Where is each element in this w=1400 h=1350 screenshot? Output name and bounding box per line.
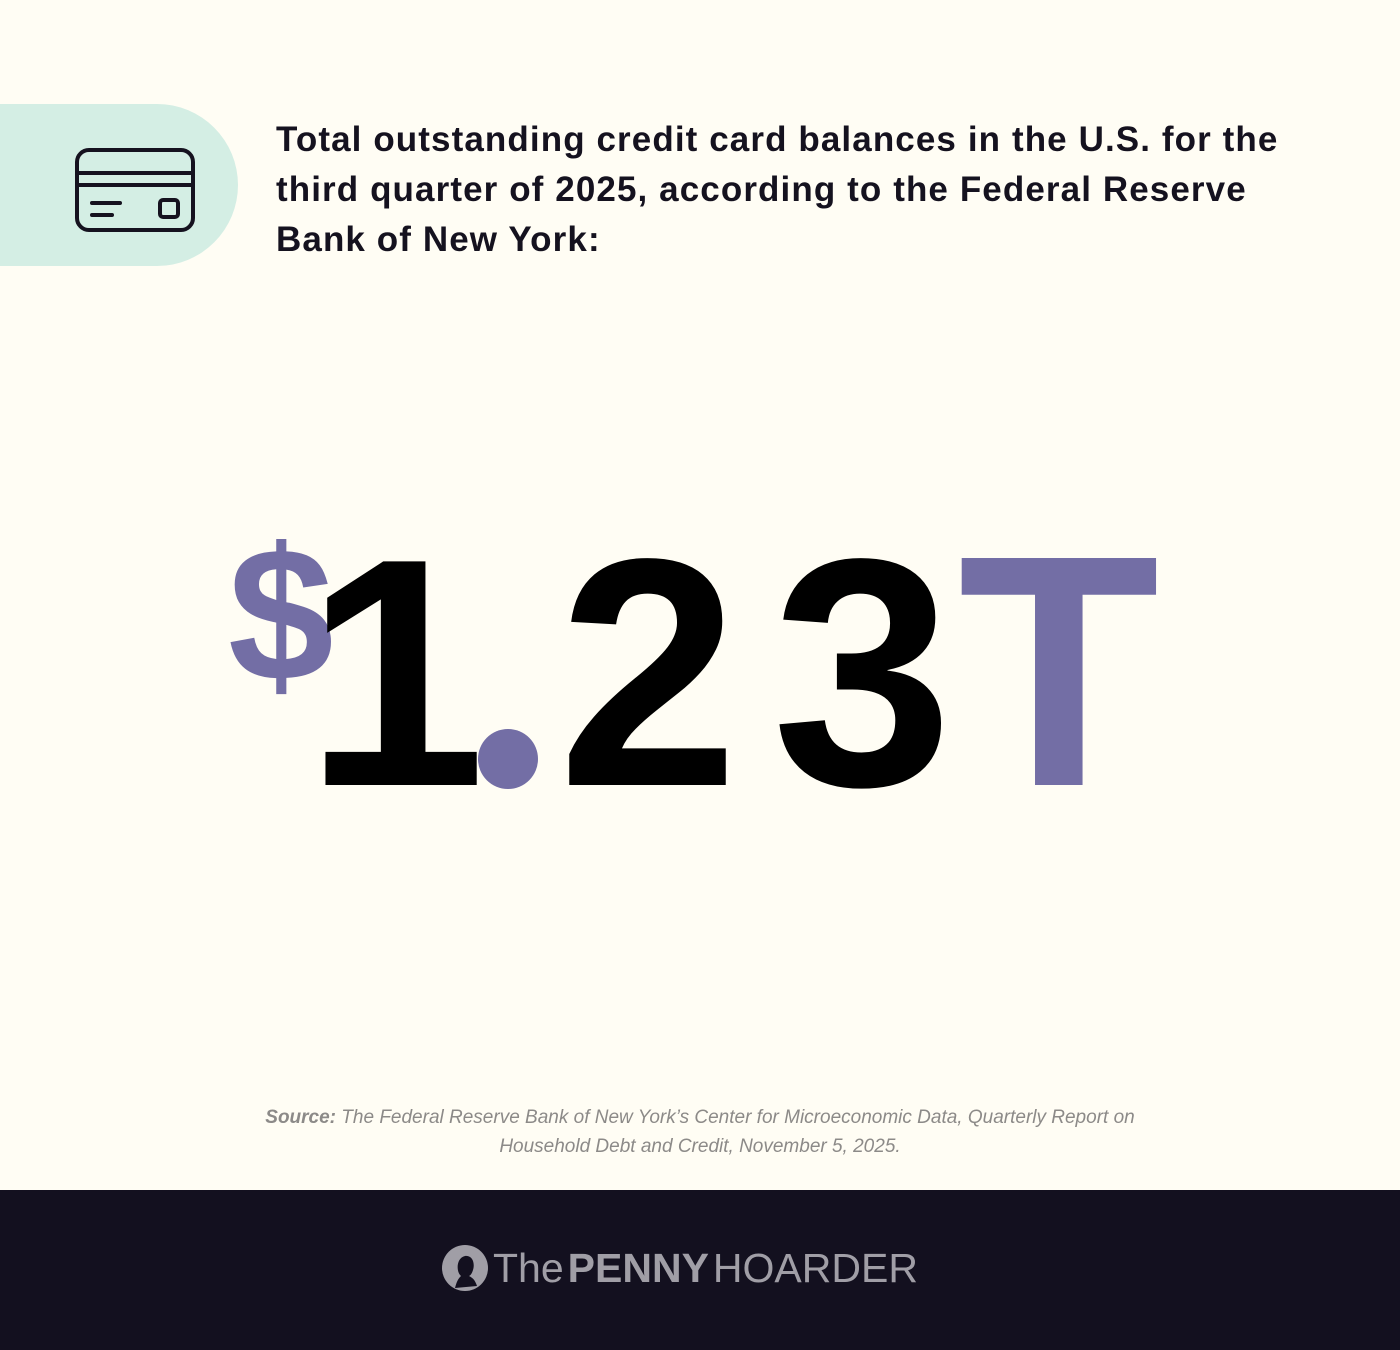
logo: PENNY bbox=[568, 1244, 709, 1290]
source note: Source: The Federal Reserve Bank of New York’s Center for Microeconomic Data, Quarterly Report on Household Debt and Credit, November 5, 2025. bbox=[265, 1107, 1135, 1157]
icon: credit card bbox=[77, 150, 193, 230]
big number: $1.23T: $ bbox=[228, 509, 334, 721]
big number: $1.23T bbox=[228, 486, 1160, 855]
big number: $1.23T: 2 bbox=[558, 491, 739, 854]
big number: $1.23T: 1 bbox=[305, 491, 486, 854]
logo: HOARDER bbox=[713, 1244, 918, 1290]
big number: $1.23T: T bbox=[958, 486, 1160, 855]
footer with logo bbox=[0, 1190, 1400, 1350]
big number: $1.23T: 3 bbox=[772, 491, 953, 854]
title: Total outstanding credit card balances in the U.S. for the third quarter of 2025, according to the Federal Reserve Bank of New York: bbox=[276, 120, 1278, 259]
icon badge: credit card bbox=[0, 104, 238, 266]
logo bbox=[442, 1244, 918, 1291]
logo: The bbox=[493, 1244, 564, 1290]
